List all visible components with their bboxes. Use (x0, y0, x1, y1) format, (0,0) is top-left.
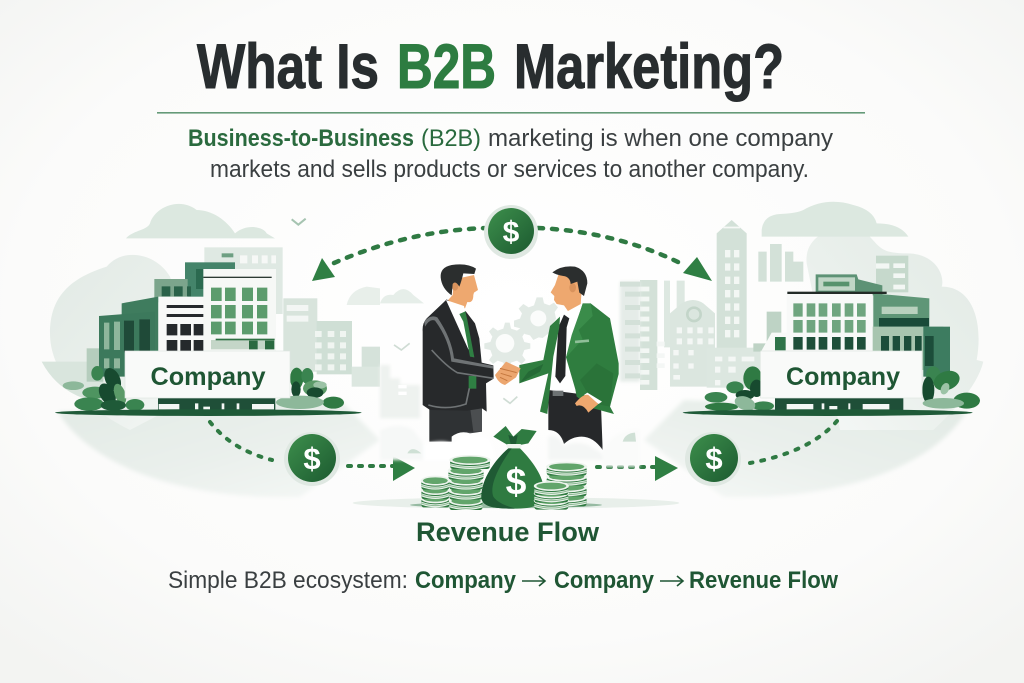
coin: bottom right: $ (705, 441, 723, 476)
small cloud puffs (407, 433, 636, 453)
person: left businessman (423, 264, 494, 442)
money bag: $ (506, 460, 527, 502)
money bag (481, 426, 544, 509)
coin: top: $ (503, 216, 520, 249)
background clouds and gears (380, 282, 640, 418)
stack: far left coins (421, 476, 450, 507)
dashed flow arrows (210, 228, 837, 481)
coin: top (484, 205, 538, 259)
ecosystem summary line: Company (554, 567, 655, 594)
title (197, 32, 784, 102)
coin: bottom left: $ (303, 441, 321, 476)
intro text: markets and sells products or services to another company. (210, 156, 809, 183)
panel: left company: Company (150, 363, 266, 391)
background: soft ground blobs (58, 400, 966, 497)
intro text: Business-to-Business (188, 125, 414, 152)
coin: bottom left (284, 432, 340, 486)
title: What Is (197, 32, 379, 102)
intro text (188, 125, 833, 183)
intro text: (B2B) (421, 125, 481, 152)
revenue flow label: Revenue Flow (416, 517, 600, 547)
stack: right coins (546, 462, 587, 506)
left buildings (99, 262, 276, 377)
handshake scene (353, 264, 679, 510)
intro text: marketing is when one company (488, 125, 833, 152)
stack: front coins (534, 481, 569, 510)
ecosystem summary line: Simple B2B ecosystem: (168, 567, 408, 594)
stack: tall left coins (448, 455, 491, 510)
ecosystem summary line: Company (415, 567, 517, 594)
right bushes (705, 366, 980, 413)
left company label (125, 351, 290, 398)
panel: right company: Company (786, 363, 900, 391)
ecosystem summary line: Revenue Flow (689, 567, 838, 594)
revenue pile (353, 426, 679, 510)
title: Marketing? (514, 32, 784, 102)
ecosystem summary line (168, 567, 838, 594)
white mist under figures (380, 426, 640, 467)
right company label (761, 351, 922, 398)
title: B2B (397, 32, 496, 102)
right buildings (760, 274, 950, 377)
left backdrop (42, 204, 380, 430)
person: right businessman (519, 266, 619, 450)
panel: left company (42, 204, 380, 430)
handshake hands (495, 362, 521, 385)
left bushes (63, 365, 344, 411)
coin: bottom right (685, 432, 741, 486)
right backdrop (640, 202, 983, 430)
panel: right company (640, 202, 983, 430)
